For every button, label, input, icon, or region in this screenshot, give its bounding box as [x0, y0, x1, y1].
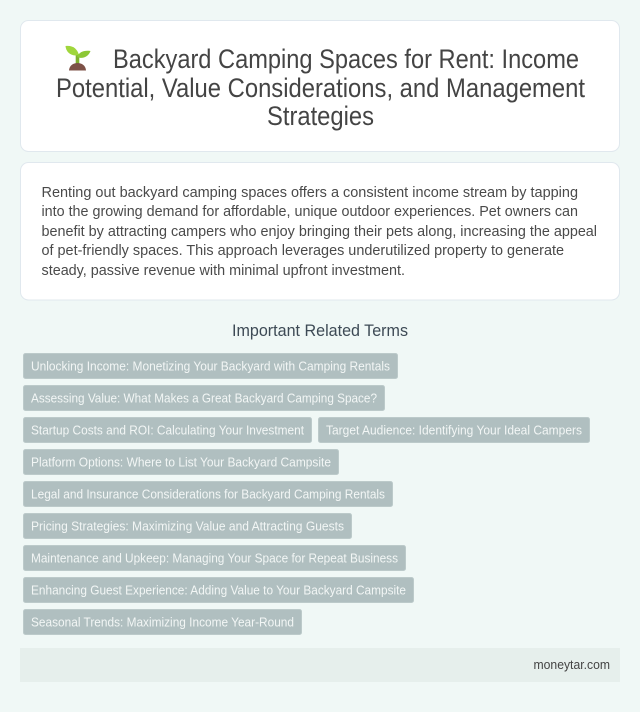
footer: moneytar.com	[534, 657, 610, 672]
tag: maintenance: Maintenance and Upkeep: Managing Your Space for Repeat Business	[31, 550, 398, 566]
panel: term tags	[24, 354, 590, 634]
tag: unlocking income: Unlocking Income: Monetizing Your Backyard with Camping Rentals	[31, 358, 390, 374]
tag: startup costs: Startup Costs and ROI: Calculating Your Investment	[31, 422, 304, 438]
tag: target audience: Target Audience: Identifying Your Ideal Campers	[326, 422, 582, 438]
tag: platform options: Platform Options: Where to List Your Backyard Campsite	[31, 454, 331, 470]
tag: seasonal trends: Seasonal Trends: Maximizing Income Year-Round	[31, 614, 294, 630]
title: Backyard Camping Spaces for Rent: Income	[113, 44, 579, 74]
panel: title card	[20, 20, 620, 152]
heading: important related terms: Important Related Terms	[232, 322, 408, 340]
panel: intro text	[20, 162, 620, 300]
tag: guest experience: Enhancing Guest Experience: Adding Value to Your Backyard Campsite	[31, 582, 406, 598]
tag: target audience	[318, 418, 590, 442]
title: Strategies	[267, 101, 374, 131]
tag: legal and insurance	[24, 482, 392, 506]
tag: guest experience	[24, 578, 414, 602]
icon: seedling	[66, 46, 90, 70]
footer	[20, 648, 620, 682]
text block: intro paragraph	[42, 184, 597, 279]
tag: pricing strategies: Pricing Strategies: Maximizing Value and Attracting Guests	[31, 518, 344, 534]
tag: assessing value	[24, 386, 384, 410]
tag: seasonal trends	[24, 610, 302, 634]
tag: startup costs	[24, 418, 312, 442]
text block: intro paragraph: steady, passive revenue with minimal upfront investment.	[42, 262, 405, 279]
tag: platform options	[24, 450, 338, 474]
title: Potential, Value Considerations, and Management	[56, 73, 585, 103]
tag: assessing value: Assessing Value: What Makes a Great Backyard Camping Space?	[31, 390, 377, 406]
text block: intro paragraph: into the growing demand for affordable, unique outdoor experiences. Pet owners can	[42, 203, 578, 220]
title	[56, 44, 585, 131]
text block: intro paragraph: benefit by attracting campers who enjoy bringing their pets along, increasing the appeal	[42, 223, 597, 240]
tag: pricing strategies	[24, 514, 352, 538]
text block: intro paragraph: Renting out backyard camping spaces offers a consistent income stream by tapping	[42, 184, 578, 201]
tag: unlocking income	[24, 354, 398, 378]
tag: maintenance	[24, 546, 406, 570]
text block: intro paragraph: of pet-friendly spaces. This approach leverages underutilized property to generate	[42, 242, 564, 259]
tag: legal and insurance: Legal and Insurance Considerations for Backyard Camping Rentals	[31, 486, 385, 502]
